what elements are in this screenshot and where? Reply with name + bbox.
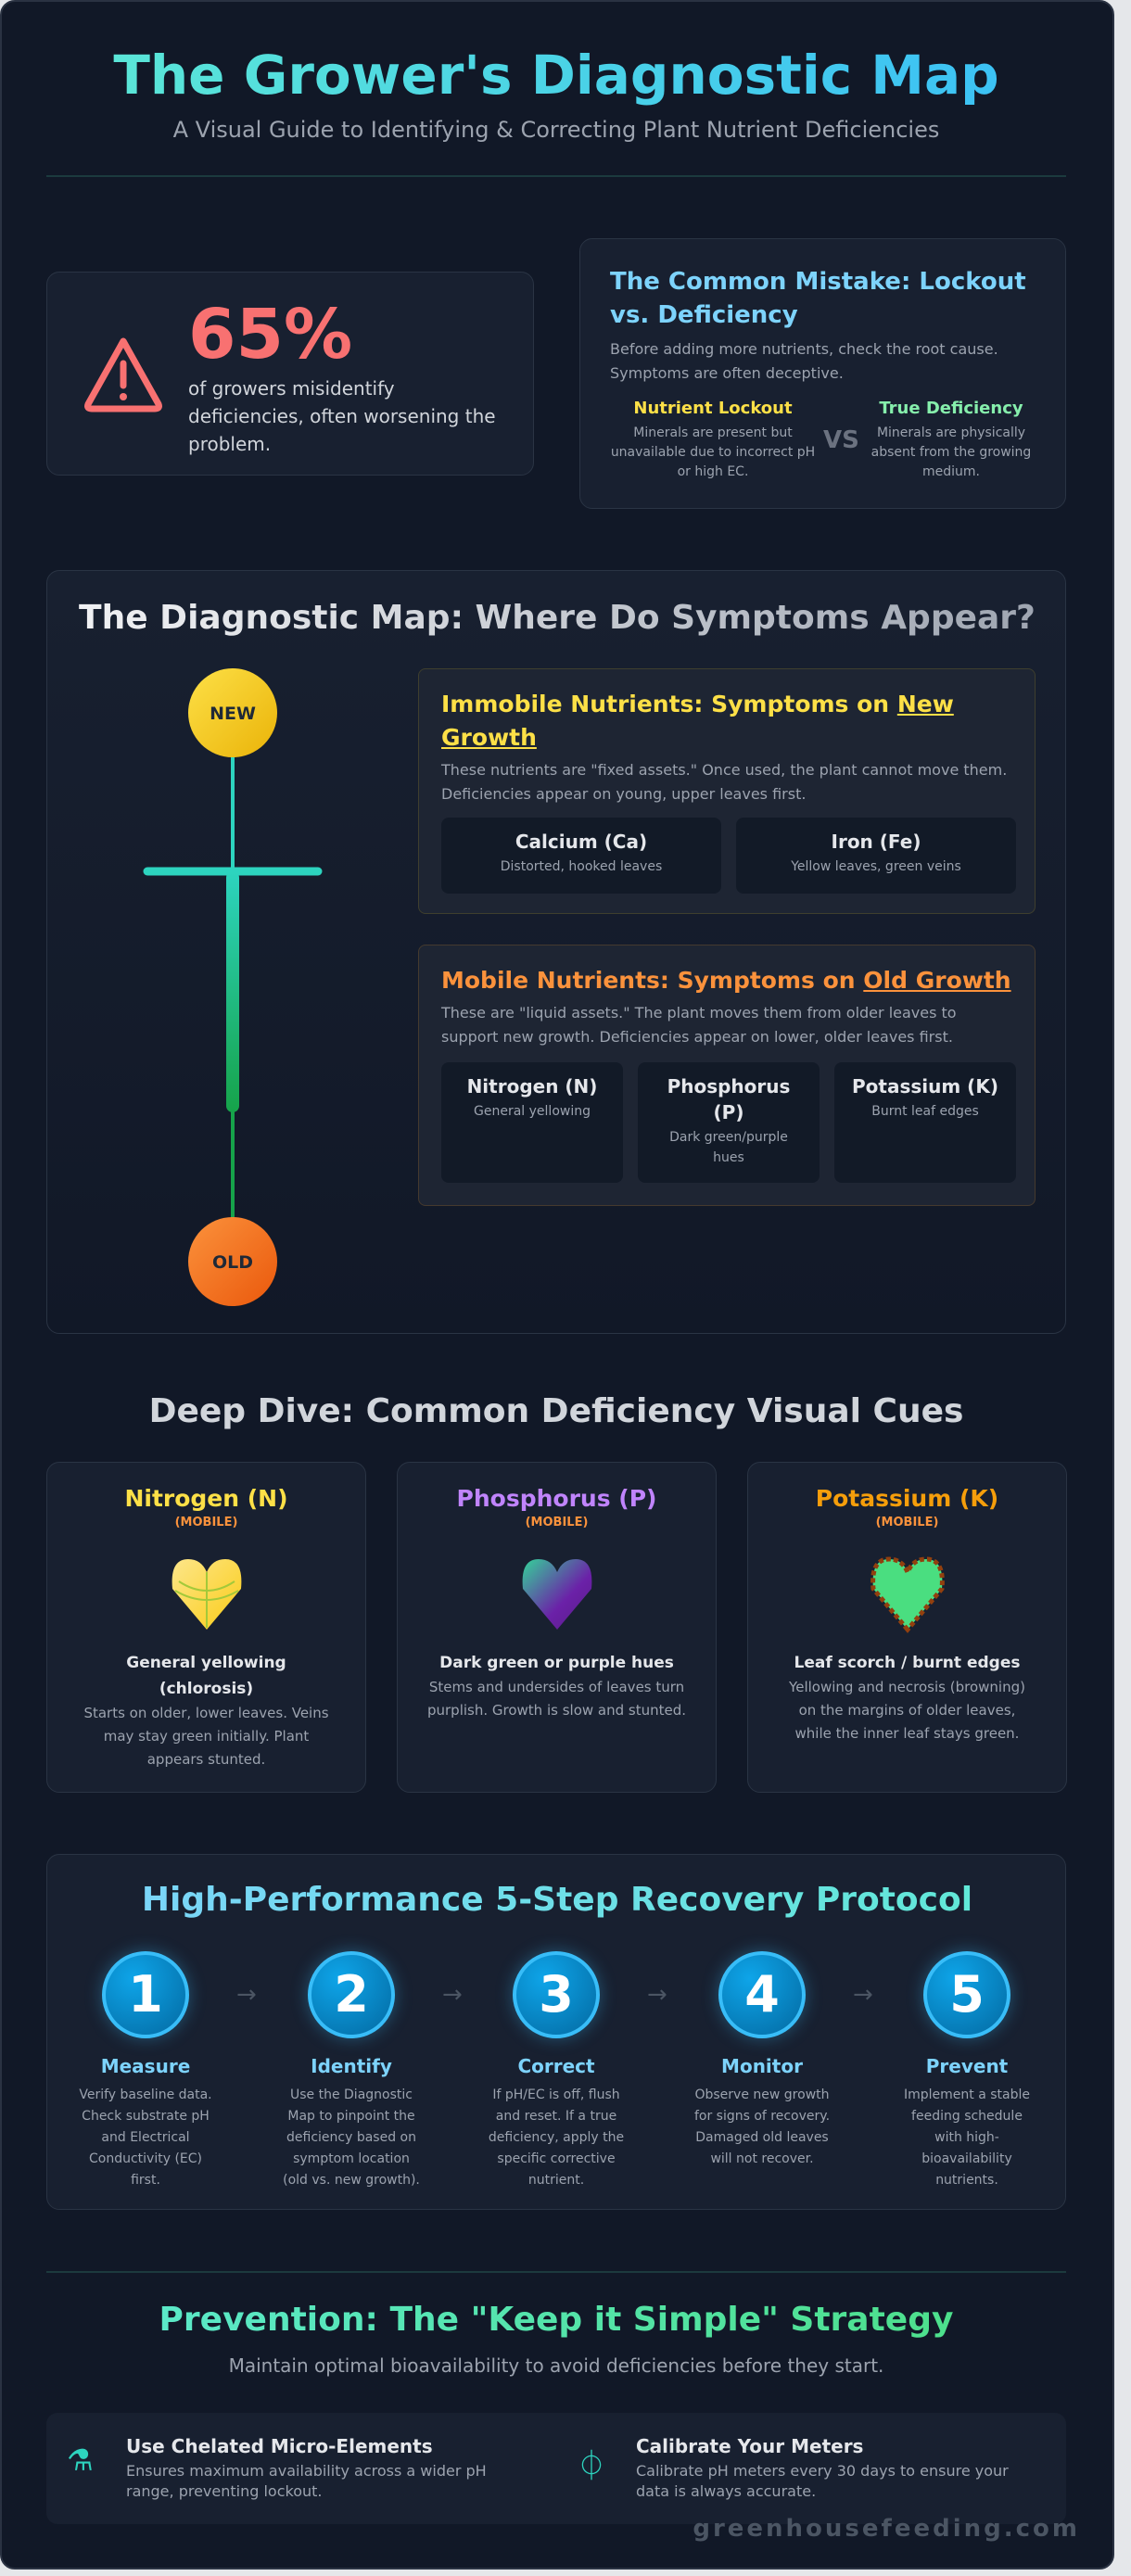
nitrogen — [441, 1062, 623, 1183]
arrow: → — [647, 1981, 667, 2009]
title — [0, 39, 1112, 111]
phosphorus: Dark green/purple hues — [669, 1130, 788, 1165]
step 2: 2 — [334, 1965, 369, 2024]
nitrogen: Nitrogen (N) — [467, 1075, 597, 1098]
iron: Yellow leaves, green veins — [791, 859, 961, 874]
card: nitrogen: General yellowing (chlorosis) — [126, 1654, 286, 1698]
step 1: Measure — [101, 2055, 190, 2077]
mobile card: These are "liquid assets." The plant moves them from older leaves to support new growth. Deficiencies appear on lower, older leaves first. — [441, 1004, 957, 1046]
step 1 — [79, 1943, 212, 2188]
potassium: Potassium (K) — [852, 1075, 998, 1098]
stat text: of growers misidentify deficiencies, often worsening the problem. — [188, 377, 496, 455]
mistake card — [579, 238, 1066, 509]
vs: VS — [823, 426, 859, 454]
phosphorus: Phosphorus (P) — [667, 1075, 790, 1123]
step 4: 4 — [744, 1965, 780, 2024]
immobile card: Immobile Nutrients: Symptoms on New Growth — [441, 691, 954, 751]
card: potassium: Yellowing and necrosis (browning) on the margins of older leaves, while the inner leaf stays green. — [789, 1679, 1025, 1742]
subtitle: A Visual Guide to Identifying & Correcting Plant Nutrient Deficiencies — [173, 117, 939, 143]
lockout — [611, 399, 815, 479]
prevention heading: Prevention: The "Keep it Simple" Strategy — [159, 2301, 953, 2339]
calcium — [441, 818, 721, 894]
card: phosphorus: (MOBILE) — [526, 1516, 588, 1529]
step 3: Correct — [517, 2055, 595, 2077]
step 4 — [694, 1943, 830, 2166]
tip: calibrate — [577, 2435, 1009, 2500]
step 3 — [489, 1943, 624, 2188]
step 5 — [904, 1943, 1030, 2188]
stat number: 65% — [188, 295, 352, 374]
tip: chelated — [67, 2435, 487, 2500]
card: potassium — [747, 1462, 1067, 1793]
arrow: → — [236, 1981, 257, 2009]
card: potassium: Potassium (K) — [816, 1485, 998, 1512]
card: nitrogen — [46, 1462, 366, 1793]
card: phosphorus: Stems and undersides of leaves turn purplish. Growth is slow and stunted. — [427, 1679, 686, 1719]
tip: calibrate: ⏀ — [577, 2448, 606, 2483]
arrow: → — [853, 1981, 873, 2009]
step 2: Use the Diagnostic Map to pinpoint the deficiency based on symptom location (old vs. new growth). — [283, 2087, 420, 2188]
true deficiency: Minerals are physically absent from the growing medium. — [871, 425, 1031, 479]
prevention subtitle: Maintain optimal bioavailability to avoid deficiencies before they start. — [229, 2354, 883, 2377]
panel: diagnostic map — [46, 570, 1066, 1334]
true deficiency — [871, 399, 1031, 479]
card: phosphorus: Phosphorus (P) — [457, 1485, 656, 1512]
card: nitrogen: Starts on older, lower leaves. Veins may stay green initially. Plant appears stunted. — [83, 1705, 329, 1768]
icon: scorched leaf — [870, 1557, 945, 1633]
watermark: greenhousefeeding.com — [693, 2515, 1080, 2543]
stat card — [46, 272, 534, 476]
tip: chelated: ⚗ — [67, 2443, 94, 2478]
tip: chelated: Use Chelated Micro-Elements — [126, 2435, 433, 2457]
heading: The Diagnostic Map: Where Do Symptoms Appear? — [79, 599, 1036, 637]
step 5: Implement a stable feeding schedule with high-bioavailability nutrients. — [904, 2087, 1030, 2188]
card: phosphorus — [397, 1462, 717, 1793]
title: The Grower's Diagnostic Map — [113, 44, 999, 107]
calcium: Distorted, hooked leaves — [501, 859, 662, 874]
icon: warning triangle — [84, 337, 162, 412]
iron — [736, 818, 1016, 894]
prevention tips box — [46, 2413, 1066, 2524]
OLD node: OLD — [212, 1252, 253, 1273]
iron: Iron (Fe) — [832, 831, 921, 853]
true deficiency: True Deficiency — [879, 399, 1023, 418]
NEW node — [188, 668, 277, 757]
step 2 — [283, 1943, 420, 2188]
lockout: Minerals are present but unavailable due to incorrect pH or high EC. — [611, 425, 815, 479]
card: potassium: (MOBILE) — [876, 1516, 938, 1529]
step 5: Prevent — [926, 2055, 1008, 2077]
calcium: Calcium (Ca) — [515, 831, 647, 853]
card: nitrogen: (MOBILE) — [175, 1516, 237, 1529]
panel: recovery protocol — [46, 1854, 1066, 2210]
immobile card — [418, 668, 1036, 914]
phosphorus — [638, 1062, 820, 1183]
step 1: Verify baseline data. Check substrate pH and Electrical Conductivity (EC) first. — [79, 2087, 212, 2188]
heading: High-Performance 5-Step Recovery Protocol — [142, 1881, 972, 1919]
deep dive heading: Deep Dive: Common Deficiency Visual Cues — [149, 1392, 963, 1430]
card: potassium: Leaf scorch / burnt edges — [794, 1654, 1020, 1672]
card: phosphorus: Dark green or purple hues — [439, 1654, 674, 1672]
step 3: If pH/EC is off, flush and reset. If a true deficiency, apply the specific corrective nutrient. — [489, 2087, 624, 2188]
tip: chelated: Ensures maximum availability across a wider pH range, preventing lockout. — [126, 2462, 487, 2500]
heading: The Common Mistake: Lockout vs. Deficiency — [610, 268, 1026, 329]
step 1: 1 — [128, 1965, 163, 2024]
plant stem diagram — [143, 668, 323, 1306]
card: nitrogen: Nitrogen (N) — [124, 1485, 288, 1512]
OLD node — [188, 1217, 277, 1306]
step 5: 5 — [949, 1965, 985, 2024]
step 4: Observe new growth for signs of recovery. Damaged old leaves will not recover. — [694, 2087, 830, 2166]
immobile card: These nutrients are "fixed assets." Once used, the plant cannot move them. Deficiencies appear on young, upper leaves first. — [441, 761, 1007, 803]
nitrogen: General yellowing — [474, 1104, 591, 1119]
potassium: Burnt leaf edges — [871, 1104, 979, 1119]
icon: yellow leaf — [172, 1559, 241, 1630]
mobile card — [418, 945, 1036, 1206]
arrow: → — [442, 1981, 463, 2009]
step 4: Monitor — [721, 2055, 803, 2077]
lockout: Nutrient Lockout — [633, 399, 793, 418]
NEW node: NEW — [210, 704, 256, 724]
tip: calibrate: Calibrate Your Meters — [636, 2435, 863, 2457]
icon: purple leaf — [523, 1559, 591, 1630]
tip: calibrate: Calibrate pH meters every 30 days to ensure your data is always accurate. — [636, 2462, 1009, 2500]
potassium — [834, 1062, 1016, 1183]
mobile card: Mobile Nutrients: Symptoms on Old Growth — [441, 967, 1011, 994]
step 3: 3 — [539, 1965, 574, 2024]
intro: Before adding more nutrients, check the root cause. Symptoms are often deceptive. — [610, 340, 998, 382]
step 2: Identify — [311, 2055, 392, 2077]
